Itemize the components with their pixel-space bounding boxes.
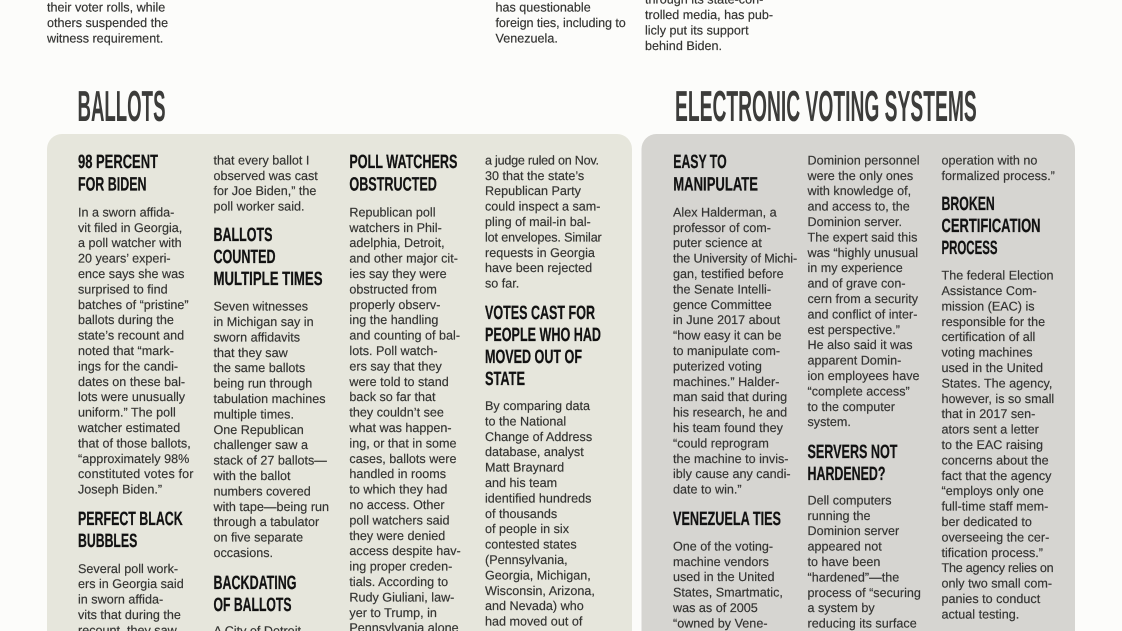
text block: sworn affidavit: dates on these bal- [78, 375, 185, 389]
subheading: easy to manipulate: EASY TO [673, 152, 727, 173]
panel: ballots [47, 134, 632, 631]
text block: Dell computers: running the [808, 509, 871, 523]
subheading: backdating of ballots [214, 573, 296, 616]
text block: formalized process: operation with no [942, 153, 1037, 167]
text block: Dominion personnel: He also said it was [808, 338, 912, 352]
text block: sworn affidavit: “approximately 98% [78, 452, 189, 466]
text block: Michigan witnesses: with tape—being run [212, 500, 329, 514]
subheading: broken certification process: CERTIFICATION [942, 216, 1040, 237]
text block: sworn affidavit: lots were unusually [78, 390, 186, 404]
text block: obstructed watchers: were told to stand [348, 375, 449, 389]
text block: obstructed watchers: ing, or that in some [349, 436, 457, 450]
text block: sworn affidavit: batches of “pristine” [78, 298, 189, 312]
text block: Dominion personnel: The expert said this [808, 230, 917, 244]
text block: Election Assistance Commission: responsible for the [942, 315, 1045, 329]
text block: change of address data: and his team [485, 476, 557, 490]
text block: Halderman testimony: puter science at [673, 236, 762, 250]
text block: change of address data: Wisconsin, Arizona, [485, 584, 595, 598]
text block: Election Assistance Commission: ators sent a letter [942, 423, 1039, 437]
text block: Halderman testimony: date to win.” [673, 483, 742, 497]
text block: Michigan witnesses: challenger saw a [214, 438, 308, 452]
subheading: poll watchers obstructed: OBSTRUCTED [349, 174, 437, 196]
text block: Dell computers: “hardened”—the [808, 570, 899, 584]
text block: obstructed watchers: access despite hav- [349, 544, 461, 558]
text block: sworn affidavit: surprised to find [78, 282, 168, 296]
subheading: servers not hardened: SERVERS NOT [808, 442, 898, 463]
text block: Election Assistance Commission: however, is so small [942, 392, 1054, 406]
subheading: 98 percent for Biden [78, 152, 158, 196]
text block: poll workers in Georgia: vits that during the [78, 608, 181, 622]
text block: Dell computers: reducing its surface [808, 617, 917, 631]
subheading: perfect black bubbles [78, 509, 183, 552]
text block: obstructed watchers: watchers in Phil- [348, 221, 442, 235]
text block: sworn affidavit: ence says she was [78, 267, 184, 281]
text block: Halderman testimony: gan, testified before [673, 267, 784, 281]
text block: Election Assistance Commission: fact that the agency [942, 469, 1052, 483]
text block: state media continuation: behind Biden. [645, 39, 722, 53]
text block: column four opening: Republican Party [485, 184, 582, 198]
subheading: votes cast for people who had moved: PEOPLE WHO HAD [485, 325, 601, 346]
text block: Michigan witnesses: being run through [214, 377, 312, 391]
text block: voter rolls continuation: others suspended the [47, 16, 168, 30]
text block: Dominion personnel: ion employees have [808, 369, 920, 383]
text block: foreign ties continuation: Venezuela. [496, 31, 558, 45]
text block: Halderman testimony: his team found they [673, 421, 784, 435]
text block: Election Assistance Commission: The federal Election [942, 269, 1054, 283]
text block: Halderman testimony: gence Committee [673, 298, 772, 312]
subheading: broken certification process: PROCESS [942, 238, 998, 259]
text block: Election Assistance Commission: full-time staff mem- [942, 500, 1048, 514]
text block: obstructed watchers: Rudy Giuliani, law- [349, 590, 454, 604]
text block: Election Assistance Commission: Assistance Com- [942, 284, 1037, 298]
text block: Dominion personnel: apparent Domin- [808, 354, 901, 368]
text block: voter rolls continuation: witness requirement. [46, 31, 163, 45]
text block: sworn affidavit: watcher estimated [77, 421, 180, 435]
text block: sworn affidavit: noted that “mark- [78, 344, 174, 358]
text block: sworn affidavit: that of those ballots, [78, 436, 191, 450]
text block: Smartmatic: States, Smartmatic, [673, 586, 783, 600]
text block: sworn affidavit: ballots during the [78, 313, 174, 327]
text block: Dominion personnel: with knowledge of, [806, 184, 911, 198]
text block: Michigan witnesses: Seven witnesses [214, 300, 308, 314]
text block: Halderman testimony: in June 2017 about [673, 313, 781, 327]
text block: Dell computers: process of “securing [808, 586, 921, 600]
text block: change of address data: of thousands [485, 507, 557, 521]
text block: obstructed watchers: and other major cit- [349, 252, 458, 266]
text block: Dominion personnel: to the computer [808, 400, 895, 414]
text block: obstructed watchers: ing proper creden- [349, 560, 452, 574]
text block: obstructed watchers: yer to Trump, in [349, 606, 437, 620]
subheading: 98 percent for Biden: FOR BIDEN [78, 174, 146, 196]
text block: change of address data: (Pennsylvania, [485, 553, 568, 567]
text block: column four opening: a judge ruled on Nov. [485, 153, 599, 167]
text block: foreign ties continuation: has questionable [496, 1, 591, 15]
text block: column four opening: have been rejected [485, 261, 592, 275]
subheading: servers not hardened [808, 442, 898, 485]
text block: Michigan witnesses: through a tabulator [214, 515, 319, 529]
text block: Dell computers: to have been [808, 555, 880, 569]
text block: Election Assistance Commission: that in 2017 sen- [942, 407, 1035, 421]
text block: column two opening: poll worker said. [214, 200, 304, 214]
text block: Halderman testimony: ibly cause any candi- [673, 467, 791, 481]
subheading: backdating of ballots: BACKDATING [214, 573, 296, 594]
text block: Michigan witnesses: on five separate [214, 531, 303, 545]
text block: change of address data: of people in six [485, 522, 570, 536]
subheading: servers not hardened: HARDENED? [808, 464, 886, 485]
text block: column four opening: lot envelopes. Similar [485, 230, 602, 244]
text block: Dell computers: Dell computers [808, 493, 892, 507]
text block: obstructed watchers: tials. According to [349, 575, 448, 589]
text block: column four opening: pling of mail-in bal- [485, 215, 591, 229]
text block: Dominion personnel: system. [808, 415, 851, 429]
text block: change of address data: By comparing data [485, 399, 590, 413]
text block: Michigan witnesses: numbers covered [214, 484, 311, 498]
text block: foreign ties continuation: foreign ties, including to [496, 16, 626, 30]
text block: obstructed watchers: no access. Other [349, 498, 445, 512]
text block: Election Assistance Commission: States. The agency, [942, 376, 1052, 390]
text block: column four opening: 30 that the state’s [485, 169, 584, 183]
text block: Dell computers: Dominion server [808, 524, 899, 538]
text block: sworn affidavit: Joseph Biden.” [78, 483, 162, 497]
text block: Halderman testimony: to manipulate com- [673, 344, 780, 358]
text block: Dell computers: a system by [808, 601, 875, 615]
text block: poll workers in Georgia: ers in Georgia said [78, 577, 184, 591]
text block: obstructed watchers: lots. Poll watch- [349, 344, 438, 358]
text block: sworn affidavit: state’s recount and [78, 329, 184, 343]
text block: obstructed watchers: ers say that they [349, 359, 443, 373]
text block: Halderman testimony: his research, he and [673, 406, 787, 420]
text block: obstructed watchers: cases, ballots were [349, 452, 457, 466]
text block: poll workers in Georgia: in sworn affida- [78, 593, 163, 607]
text block: obstructed watchers: back so far that [349, 390, 436, 404]
text block: change of address data: Change of Address [485, 430, 592, 444]
text block: Election Assistance Commission: The agency relies on [942, 561, 1054, 575]
text block: obstructed watchers: properly observ- [349, 298, 440, 312]
subheading: votes cast for people who had moved: STATE [485, 369, 525, 390]
text block: sworn affidavit: uniform.” The poll [78, 406, 176, 420]
subheading: poll watchers obstructed [349, 152, 458, 196]
text block: Halderman testimony: the University of Michi- [673, 252, 797, 266]
text block: poll workers in Georgia: Several poll work- [78, 562, 178, 576]
text block: Election Assistance Commission: only two small com- [942, 577, 1052, 591]
text block: Dominion personnel: Dominion server. [808, 215, 902, 229]
text block: sworn affidavit: a poll watcher with [78, 236, 182, 250]
text block: Halderman testimony: professor of com- [673, 221, 771, 235]
text block: column two opening: for Joe Biden,” the [214, 184, 316, 198]
text block: Dominion personnel: was “highly unusual [806, 246, 918, 260]
subheading: ballots counted multiple times: COUNTED [214, 247, 276, 268]
text block: change of address data: Matt Braynard [485, 461, 564, 475]
text block: Halderman testimony: puterized voting [673, 359, 762, 373]
text block: Election Assistance Commission: ber dedicated to [942, 515, 1032, 529]
text block: Halderman testimony: machines.” Halder- [673, 375, 779, 389]
text block: Dominion personnel: and access to, the [808, 200, 910, 214]
subheading: easy to manipulate [673, 152, 758, 196]
text block: obstructed watchers: they couldn’t see [349, 406, 444, 420]
text block: Michigan witnesses: sworn affidavits [214, 330, 300, 344]
text block: Election Assistance Commission: overseeing the cer- [942, 530, 1049, 544]
text block: Smartmatic: “owned by Vene- [673, 616, 768, 630]
text block: change of address data: had moved out of [485, 615, 583, 629]
text block: Election Assistance Commission: actual testing. [942, 607, 1019, 621]
text block: Halderman testimony: man said that during [673, 390, 787, 404]
text block: obstructed watchers: handled in rooms [349, 467, 446, 481]
text block: Michigan witnesses: the same ballots [214, 361, 305, 375]
text block: Election Assistance Commission: mission (EAC) is [942, 299, 1035, 313]
text block: Michigan witnesses: that they saw [214, 346, 289, 360]
text block: obstructed watchers: Republican poll [349, 205, 436, 219]
text block: obstructed watchers: adelphia, Detroit, [349, 236, 445, 250]
text block: Election Assistance Commission: voting machines [942, 346, 1033, 360]
text block: sworn affidavit: In a sworn affida- [78, 205, 174, 219]
text block: Dominion personnel: in my experience [808, 261, 903, 275]
text block: formalized process: formalized process.” [942, 169, 1055, 183]
text block: sworn affidavit: constituted votes for [78, 467, 194, 481]
text block: Halderman testimony: Alex Halderman, a [673, 205, 777, 219]
text: BALLOTS [78, 83, 166, 131]
subheading: votes cast for people who had moved: VOTES CAST FOR [485, 303, 595, 324]
text block: state media continuation: trolled media, has pub- [645, 8, 773, 22]
text block: Dominion personnel: Dominion personnel [808, 153, 920, 167]
subheading: easy to manipulate: MANIPULATE [673, 174, 758, 196]
text block: Election Assistance Commission: concerns about the [942, 453, 1049, 467]
text block: obstructed watchers: they were denied [349, 529, 445, 543]
text block: change of address data: Georgia, Michigan, [485, 568, 591, 582]
text block: Election Assistance Commission: to the EAC raising [942, 438, 1043, 452]
subheading: broken certification process [942, 194, 1040, 259]
text block: change of address data: contested states [485, 538, 577, 552]
text block: change of address data: to the National [485, 414, 566, 428]
text block: sworn affidavit: 20 years’ experi- [78, 252, 171, 266]
text block: column four opening: so far. [485, 277, 519, 291]
text block: Halderman testimony: “how easy it can be [673, 329, 782, 343]
text block: sworn affidavit: ings for the candi- [78, 359, 178, 373]
text block: Dominion personnel: and of grave con- [808, 277, 906, 291]
text block: Dominion personnel: cern from a security [808, 292, 919, 306]
subheading: perfect black bubbles: PERFECT BLACK [78, 509, 183, 530]
text block: Election Assistance Commission: used in the United [942, 361, 1043, 375]
text block: Election Assistance Commission: tification process.” [942, 546, 1043, 560]
text block: voter rolls continuation: their voter rolls, while [47, 1, 165, 15]
text block: Dell computers: appeared not [808, 540, 882, 554]
text block: Halderman testimony: the machine to invis- [673, 452, 788, 466]
text block: obstructed watchers: obstructed from [349, 282, 437, 296]
text block: Election Assistance Commission: certification of all [942, 330, 1035, 344]
text block: Smartmatic: One of the voting- [673, 539, 773, 553]
text block: Halderman testimony: the Senate Intelli- [673, 282, 771, 296]
text block: change of address data: and Nevada) who [485, 599, 584, 613]
subheading: votes cast for people who had moved [485, 303, 601, 390]
text block: obstructed watchers: ing the handling [349, 313, 438, 327]
text block: Michigan witnesses: stack of 27 ballots— [214, 454, 327, 468]
text block: column two opening: observed was cast [214, 169, 318, 183]
text block: Smartmatic: was as of 2005 [672, 601, 758, 615]
text block: Dominion personnel: est perspective.” [808, 323, 900, 337]
subheading: Venezuela ties: VENEZUELA TIES [673, 509, 781, 530]
text block: Michigan witnesses: with the ballot [212, 469, 291, 483]
text block: change of address data: identified hundreds [485, 491, 591, 505]
text block: sworn affidavit: vit filed in Georgia, [78, 221, 182, 235]
text block: Michigan witnesses: tabulation machines [214, 392, 326, 406]
text block: Michigan witnesses: occasions. [214, 546, 273, 560]
text block: Michigan witnesses: One Republican [214, 423, 304, 437]
text block: obstructed watchers: what was happen- [348, 421, 452, 435]
text block: obstructed watchers: poll watchers said [349, 513, 450, 527]
subheading: votes cast for people who had moved: MOVED OUT OF [485, 347, 582, 368]
text block: Smartmatic: machine vendors [673, 555, 769, 569]
text block: Michigan witnesses: in Michigan say in [214, 315, 314, 329]
text block: Halderman testimony: “could reprogram [673, 436, 769, 450]
subheading: perfect black bubbles: BUBBLES [78, 531, 137, 552]
text block: Dominion personnel: were the only ones [806, 169, 913, 183]
subheading: ballots counted multiple times [214, 225, 323, 290]
subheading: backdating of ballots: OF BALLOTS [214, 595, 292, 616]
text block: column four opening: requests in Georgia [485, 246, 595, 260]
text block: Smartmatic: used in the United [673, 570, 775, 584]
text block: obstructed watchers: and counting of bal- [349, 329, 460, 343]
text block: Michigan witnesses: multiple times. [214, 407, 294, 421]
text block: column two opening: that every ballot I [214, 153, 309, 167]
text block: change of address data: database, analyst [485, 445, 584, 459]
panel: electronic voting systems [642, 134, 1075, 631]
subheading: ballots counted multiple times: MULTIPLE TIMES [214, 269, 323, 290]
text block: obstructed watchers: ies say they were [349, 267, 447, 281]
text block: Election Assistance Commission: “employs only one [942, 484, 1044, 498]
subheading: poll watchers obstructed: POLL WATCHERS [349, 152, 458, 173]
text block: Dominion personnel: and conflict of inter- [808, 307, 917, 321]
subheading: broken certification process: BROKEN [942, 194, 995, 215]
subheading: ballots counted multiple times: BALLOTS [214, 225, 273, 246]
text block: Election Assistance Commission: panies to conduct [942, 592, 1041, 606]
text block: state media continuation: licly put its support [645, 23, 749, 37]
subheading: 98 percent for Biden: 98 PERCENT [78, 152, 158, 173]
text block: Dominion personnel: “complete access” [808, 384, 910, 398]
text block: obstructed watchers: to which they had [349, 483, 447, 497]
text block: column four opening: could inspect a sam- [485, 200, 600, 214]
